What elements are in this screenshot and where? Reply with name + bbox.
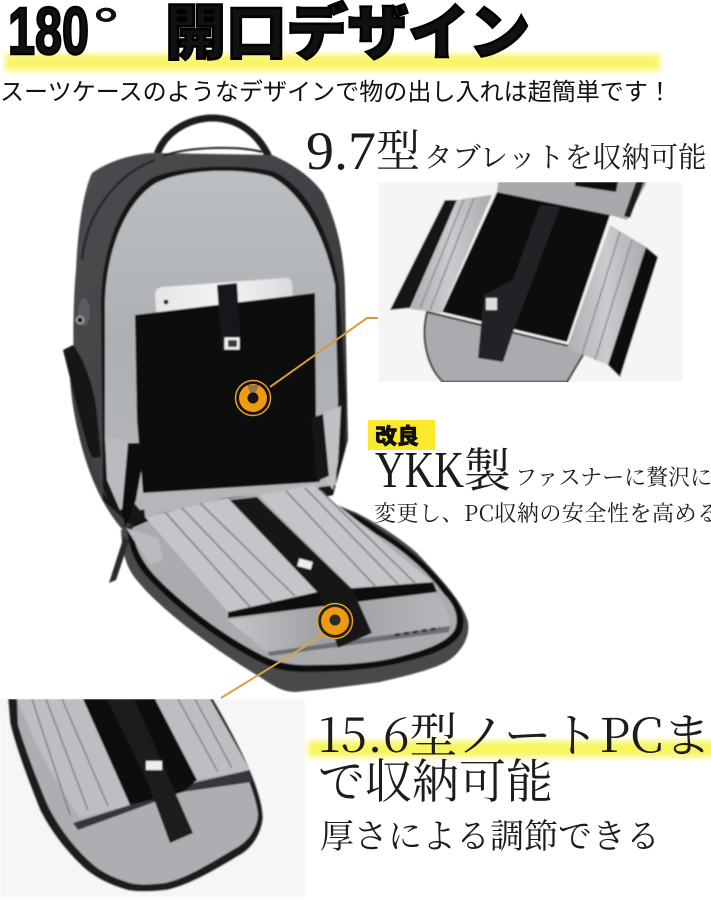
black panel <box>442 192 610 342</box>
USB port <box>76 298 90 326</box>
side pocket <box>63 345 101 458</box>
title highlight <box>5 54 660 71</box>
heading: tablet: 型 <box>376 115 420 179</box>
photo: open backpack <box>63 118 468 692</box>
strap buckle <box>224 337 240 350</box>
heading: laptop: で収納可能 <box>318 745 553 812</box>
left flap <box>390 195 492 313</box>
body text: YKK: 変更し、PC収納の安全性を高める <box>374 497 711 528</box>
dark pad shadow <box>73 770 252 830</box>
laptop heading highlight <box>308 741 711 757</box>
badge: improved <box>368 420 435 450</box>
heading: YKK: YKK <box>375 442 464 499</box>
callout line: tablet <box>270 318 378 387</box>
heading: YKK <box>375 434 711 501</box>
lid lining <box>132 490 457 665</box>
zipper pull <box>109 536 129 583</box>
right padded panel <box>258 485 433 588</box>
side flaps <box>122 414 329 528</box>
dark pad shadow <box>228 582 437 618</box>
side seam <box>82 160 155 260</box>
shell <box>8 699 263 892</box>
tablet strap <box>217 283 241 352</box>
panel strap <box>478 205 560 362</box>
badge: improved: 改良 <box>375 424 419 449</box>
photo: laptop compartment <box>0 699 305 897</box>
subtitle: スーツケースのようなデザインで物の出し入れは超簡単です！ <box>0 79 672 106</box>
top zipper <box>163 148 262 156</box>
marker: laptop <box>318 604 352 638</box>
upper lining <box>497 182 647 220</box>
laptop strap <box>230 497 372 648</box>
strap logo <box>297 558 313 570</box>
carry handle <box>155 118 268 163</box>
backpack body <box>73 153 348 530</box>
lower lining <box>424 312 586 382</box>
title <box>8 0 530 69</box>
inner rim <box>101 166 346 525</box>
lining <box>17 699 258 884</box>
photo: tablet compartment <box>378 182 683 382</box>
panel strap logo <box>486 298 497 310</box>
right pad <box>155 699 250 780</box>
back panel bottom <box>143 482 320 517</box>
heading: laptop <box>318 699 711 812</box>
right flap <box>567 225 658 377</box>
body text: laptop: 厚さによる調節できる <box>320 809 660 858</box>
laptop <box>228 593 450 656</box>
left pad <box>17 699 130 818</box>
heading: YKK: ファスナーに贅沢に <box>515 461 711 492</box>
lining lower panel <box>105 437 143 510</box>
lining fold <box>126 528 163 565</box>
heading: tablet <box>306 115 706 181</box>
title: 開口デザイン <box>165 0 530 67</box>
marker: tablet <box>236 380 270 416</box>
left padded panel <box>145 498 317 612</box>
centre band <box>83 699 197 805</box>
heading: tablet: タブレットを収納可能 <box>424 135 706 176</box>
black tablet pocket <box>135 293 320 493</box>
strap <box>107 699 193 843</box>
grey lining <box>105 171 338 510</box>
lid fabric <box>121 490 468 692</box>
tablet <box>155 278 293 322</box>
strap logo <box>146 761 162 770</box>
heading: tablet: 9.7 <box>306 121 376 181</box>
heading: laptop: 15.6型ノートPCま <box>318 699 711 766</box>
heading: YKK: 製 <box>464 434 511 501</box>
lid rim <box>126 488 464 672</box>
callout line: laptop <box>221 634 325 698</box>
